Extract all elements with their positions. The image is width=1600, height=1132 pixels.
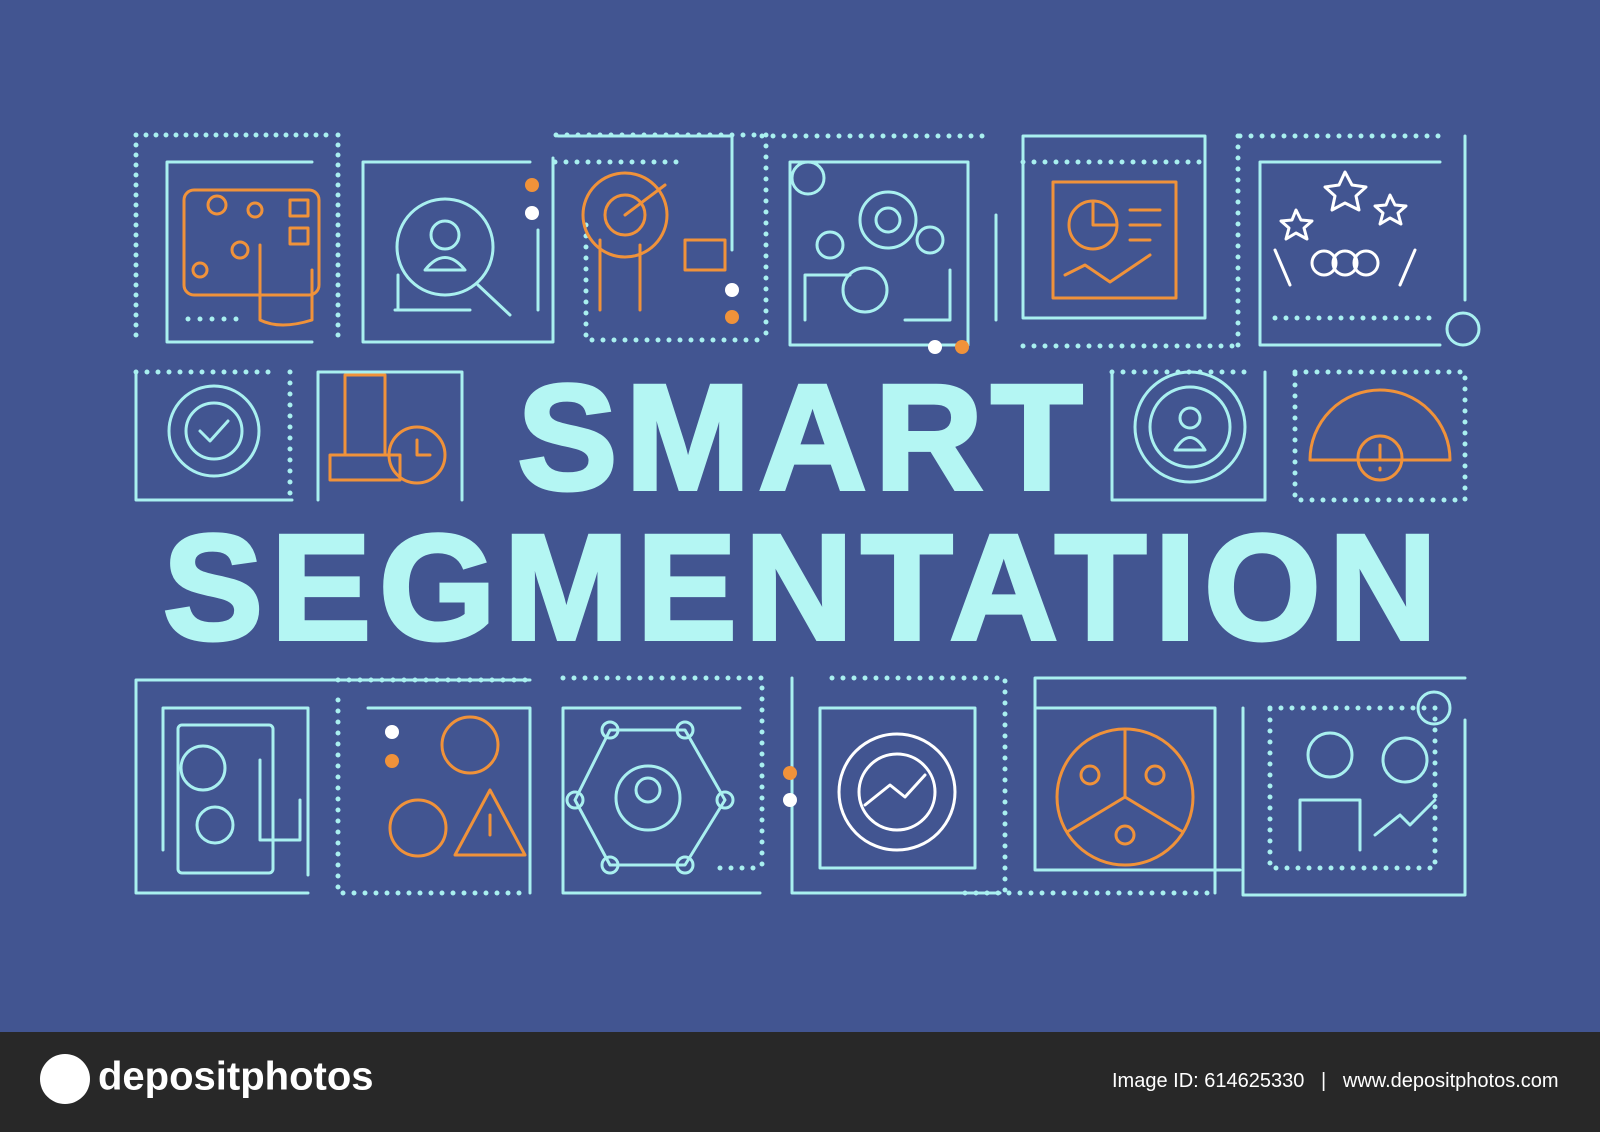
frames middle row — [136, 372, 1465, 500]
frames bottom row — [136, 678, 1465, 895]
frames top row — [136, 135, 1479, 346]
title: SMART: SMART — [517, 353, 1091, 521]
icons — [169, 172, 1450, 873]
title: SEGMENTATION: SEGMENTATION — [163, 503, 1445, 671]
footer info: Image ID: 614625330 | www.depositphotos.com — [1112, 1070, 1559, 1092]
footer logo: depositphotos — [98, 1055, 374, 1099]
dots — [385, 178, 969, 807]
footer bar — [0, 1032, 1600, 1132]
